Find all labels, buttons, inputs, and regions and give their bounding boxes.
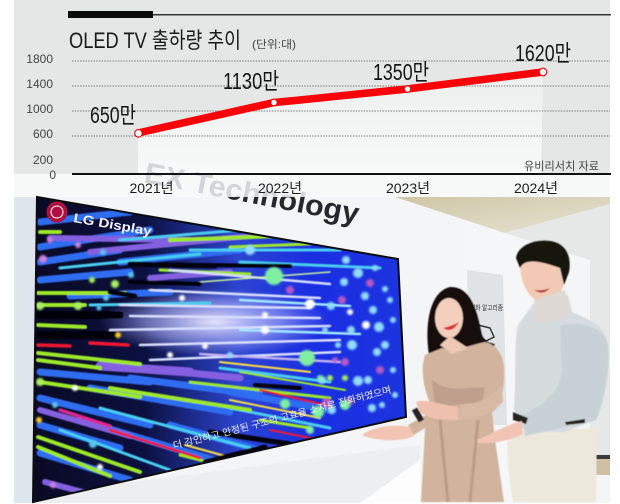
screen logo: LG Display <box>46 202 154 239</box>
hands <box>363 426 414 440</box>
value labels: 1130만 <box>223 68 279 94</box>
y axis labels: 0 <box>49 168 56 182</box>
model: woman in beige dress <box>363 287 504 502</box>
showroom background <box>14 197 610 503</box>
header rule <box>68 11 611 18</box>
x axis labels: 2021년 <box>129 180 174 196</box>
x axis labels <box>129 180 558 196</box>
heading: OLED TV 출하량 추이 <box>69 28 241 53</box>
watch <box>412 407 424 423</box>
wall lettering: Technology: EX Technology <box>142 157 362 230</box>
y axis labels: 600 <box>33 127 53 141</box>
value labels: 1620만 <box>515 40 571 66</box>
hair <box>516 241 570 285</box>
screen streaks <box>38 212 380 494</box>
icon: sign emblem <box>478 325 494 341</box>
face <box>520 257 566 303</box>
face <box>435 298 463 338</box>
x axis labels: 2022년 <box>258 180 302 196</box>
trousers <box>507 428 597 502</box>
x axis labels: 2024년 <box>514 180 558 196</box>
panel: OLED TV shipments line chart <box>14 0 611 197</box>
y axis labels: 1000 <box>26 102 53 116</box>
TV frame <box>33 197 406 502</box>
model: man in pale sweater <box>477 241 609 502</box>
grid lines and baseline <box>72 61 611 174</box>
value labels: 650만 <box>90 102 136 128</box>
data points <box>135 68 547 137</box>
hair <box>427 287 495 360</box>
y axis labels: 1400 <box>26 77 53 91</box>
screen caption: 더 강인하고 안정된 구조의 고효율 소자로 진화하였으며 <box>172 384 393 452</box>
chart background: faded exhibition wall <box>138 75 543 174</box>
belt <box>513 412 585 425</box>
unit note: (단위:대) <box>252 38 296 51</box>
panel: photo of LG Display OLED TV with two models <box>14 196 610 504</box>
x axis labels: 2023년 <box>386 180 430 196</box>
source note: 유비리서치 자료 <box>524 160 599 173</box>
y axis labels: 200 <box>33 153 53 167</box>
OLED TV screen <box>33 197 406 502</box>
value labels <box>90 40 571 128</box>
y axis labels <box>26 52 56 182</box>
screen bokeh dots <box>36 233 398 488</box>
sign text on panel: 인화 알고리즘 <box>470 303 503 312</box>
dress <box>421 342 504 502</box>
value labels: 1350만 <box>373 59 429 85</box>
sweater <box>514 295 609 432</box>
data line <box>138 72 543 133</box>
screen logo: LG Display: LG Display <box>72 210 154 239</box>
faded wall lettering: EX Technology <box>142 157 362 230</box>
forearm <box>458 385 503 420</box>
hand <box>477 421 523 443</box>
y axis labels: 1800 <box>26 52 53 66</box>
